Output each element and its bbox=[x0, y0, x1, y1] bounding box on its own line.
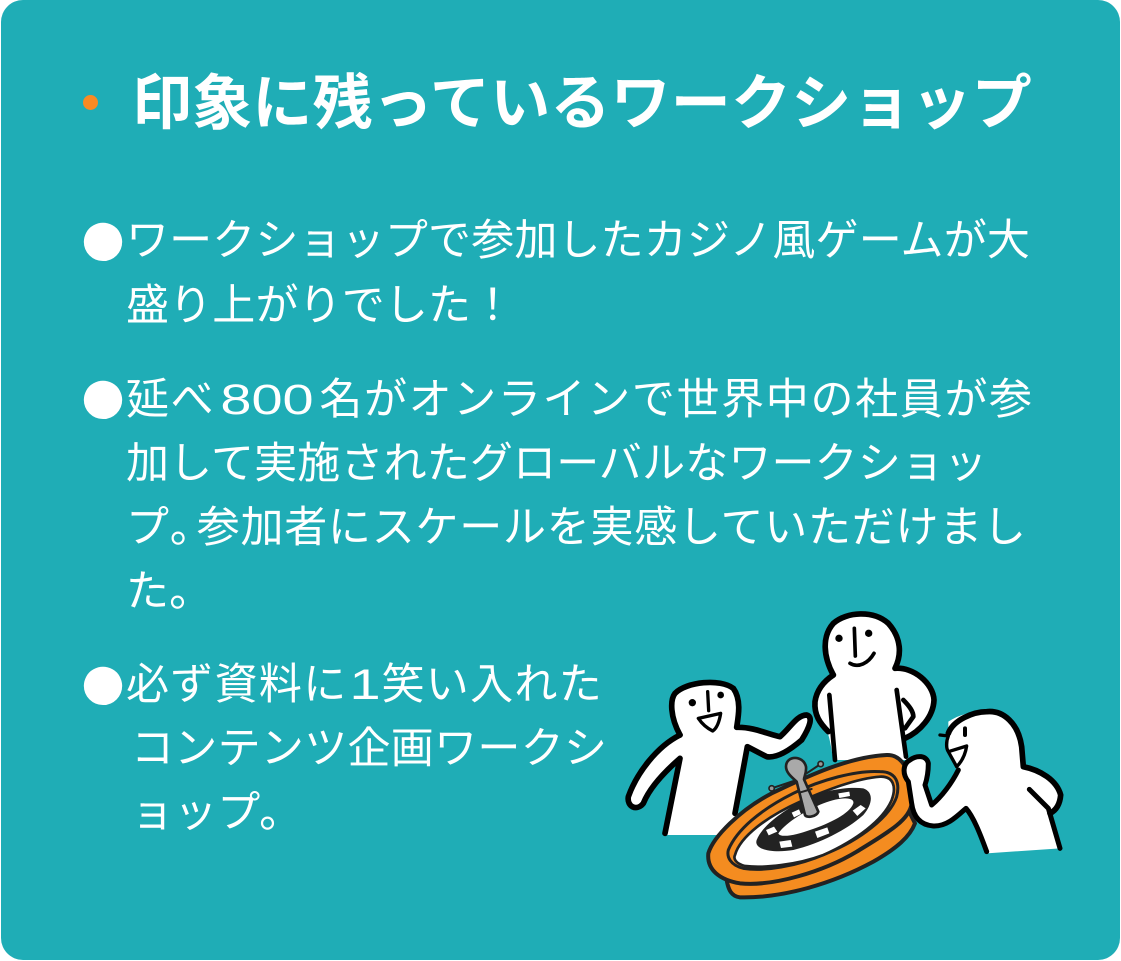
text block: global online workshop: た。 bbox=[126, 568, 212, 616]
ring inner bbox=[778, 798, 853, 836]
spindle bbox=[786, 758, 818, 817]
spindle arms bbox=[772, 764, 821, 788]
text block: humour content: 1 bbox=[349, 661, 380, 709]
title: 印象に残っているワークショップ bbox=[132, 70, 1032, 137]
wheel upper rim bbox=[708, 755, 912, 884]
text block: global online workshop: 延べ 名がオンラインで世界中の社員が参 bbox=[126, 376, 1034, 424]
orange title bullet bbox=[83, 95, 98, 110]
text block: humour content: ● bbox=[76, 630, 130, 730]
illustration: three people around a roulette wheel bbox=[625, 611, 1064, 900]
text block: global online workshop: プ。参加者にスケールを実感していただけまし bbox=[126, 504, 1027, 552]
text block: global online workshop: 加して実施されたグローバルなワークショッ bbox=[126, 440, 987, 488]
text block: humour content: コンテンツ企画ワークシ bbox=[131, 725, 607, 773]
text block: humour content: ョップ。 bbox=[131, 789, 302, 837]
text block: global online workshop: ● bbox=[76, 344, 130, 444]
text block: casino game bbox=[76, 186, 1030, 330]
person: right bbox=[904, 711, 1061, 853]
inner track bbox=[728, 771, 898, 869]
person: middle bbox=[815, 614, 934, 760]
black number ring bbox=[756, 788, 871, 851]
person: left bbox=[628, 682, 810, 835]
ring number slots bbox=[766, 792, 866, 848]
roulette wheel bbox=[708, 755, 915, 897]
text block: global online workshop: 800 bbox=[221, 376, 314, 424]
white bowl bbox=[734, 777, 894, 867]
text block: humour content bbox=[76, 630, 607, 837]
text block: casino game: ワークショップで参加したカジノ風ゲームが大 bbox=[126, 217, 1030, 265]
text block: casino game: 盛り上がりでした！ bbox=[126, 282, 514, 330]
text block: humour content: 必ず資料に 笑い入れた bbox=[126, 661, 603, 709]
text block: casino game: ● bbox=[76, 186, 130, 286]
wheel base rim bbox=[727, 807, 915, 897]
text block: global online workshop bbox=[76, 344, 1034, 616]
